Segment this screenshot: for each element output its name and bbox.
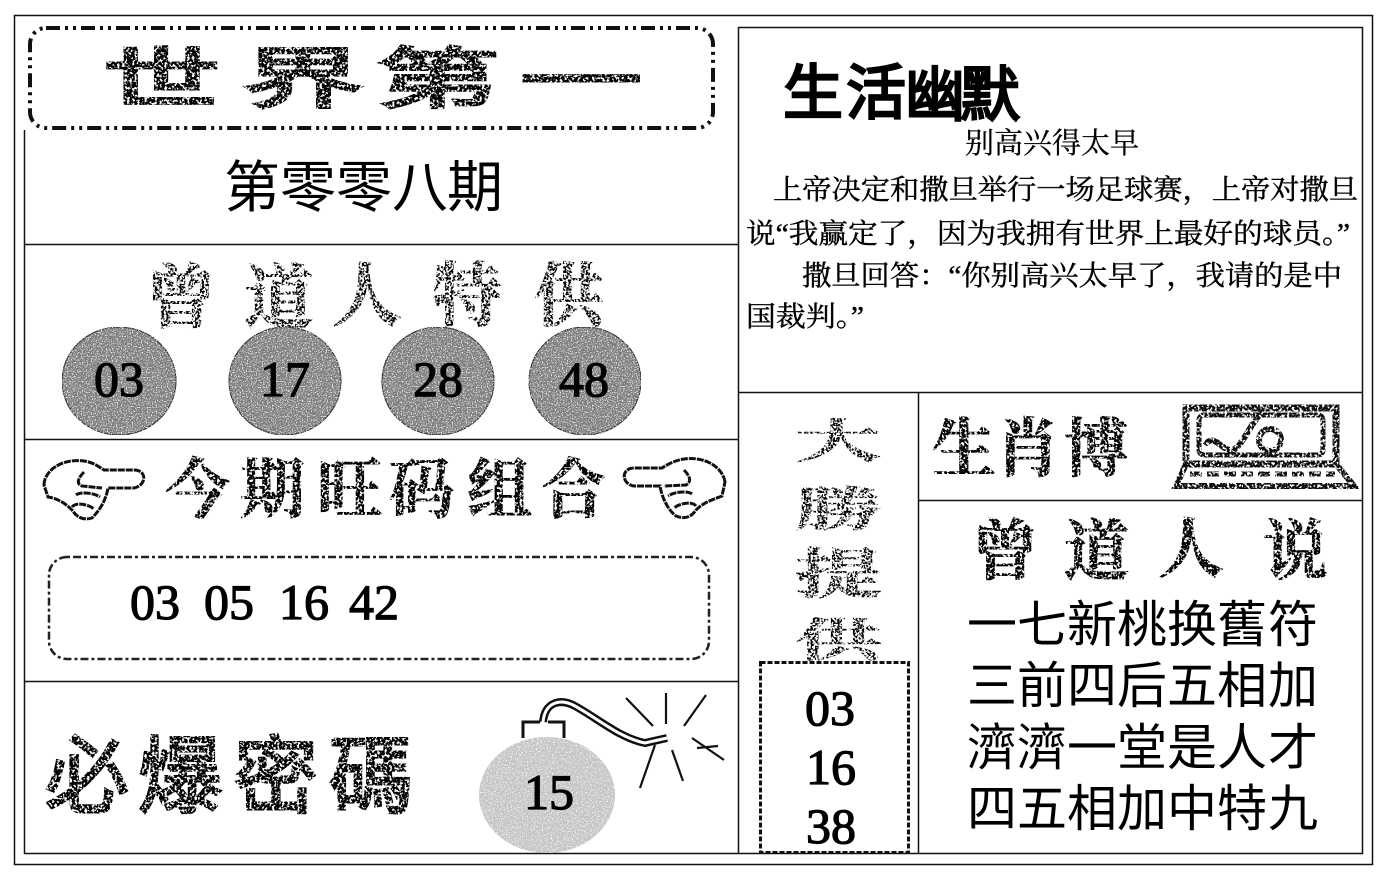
issue number: 第零零八期 bbox=[224, 156, 503, 219]
poem: 三前四后五相加 bbox=[967, 658, 1318, 714]
vertical heading: 供 bbox=[795, 615, 886, 666]
heading: 特 bbox=[432, 259, 502, 336]
heading: 码 bbox=[389, 455, 454, 527]
heading: 博 bbox=[1064, 414, 1128, 485]
icon: right pointing hand bbox=[624, 459, 725, 518]
icon: computer bbox=[1176, 408, 1354, 486]
panel: bomb code bbox=[45, 693, 724, 853]
icon: bomb bbox=[479, 693, 724, 853]
heading: 今 bbox=[165, 455, 230, 527]
box numbers: 16 bbox=[806, 739, 856, 795]
story title: 别高兴得太早 bbox=[965, 127, 1139, 160]
story text: 上帝决定和撒旦举行一场足球赛，上帝对撒旦 bbox=[773, 174, 1358, 206]
heading: 说 bbox=[1262, 516, 1328, 589]
vertical heading: 勝 bbox=[795, 485, 882, 537]
heading: 人 bbox=[332, 259, 402, 336]
heading: 人 bbox=[1158, 514, 1224, 587]
heading: 生 bbox=[783, 60, 843, 127]
title text bbox=[103, 42, 642, 118]
heading: 必 bbox=[45, 730, 129, 824]
panel: title bbox=[30, 28, 713, 128]
heading: 幽 bbox=[905, 62, 965, 129]
combination numbers bbox=[130, 574, 399, 630]
panel: sponsor column bbox=[760, 417, 908, 854]
poem: 四五相加中特九 bbox=[967, 781, 1318, 837]
icon: left pointing hand bbox=[44, 461, 144, 519]
heading: 爆 bbox=[138, 730, 222, 824]
vertical heading: 提 bbox=[795, 544, 882, 605]
dashed number box bbox=[49, 557, 709, 659]
panel: humour story bbox=[746, 60, 1358, 333]
heading bbox=[45, 730, 413, 824]
heading bbox=[146, 259, 608, 338]
panel: zodiac bbox=[932, 408, 1354, 486]
ball numbers: 17 bbox=[260, 351, 310, 407]
heading bbox=[783, 60, 1020, 129]
ball numbers bbox=[94, 351, 609, 407]
title text: 第 bbox=[376, 43, 500, 117]
heading: 生 bbox=[932, 414, 996, 485]
heading: 曾 bbox=[146, 261, 216, 338]
heading: 曾 bbox=[972, 516, 1038, 589]
heading: 组 bbox=[467, 455, 532, 527]
heading: 肖 bbox=[996, 414, 1060, 485]
ball numbers: 03 bbox=[94, 351, 144, 407]
title text: 界 bbox=[242, 42, 364, 116]
heading: 道 bbox=[1064, 516, 1130, 589]
poem: 濟濟一堂是人才 bbox=[967, 720, 1318, 776]
heading bbox=[972, 514, 1328, 589]
story text: 撒旦回答：“你别高兴太早了，我请的是中 bbox=[802, 260, 1342, 292]
ball numbers: 48 bbox=[559, 351, 609, 407]
heading: 默 bbox=[960, 62, 1020, 129]
heading bbox=[165, 455, 606, 527]
heading: 旺 bbox=[317, 455, 382, 527]
panel: special numbers bbox=[62, 259, 641, 435]
poem: 一七新桃换舊符 bbox=[967, 597, 1318, 653]
ball numbers: 28 bbox=[413, 351, 463, 407]
story text: 说“我赢定了，因为我拥有世界上最好的球员。” bbox=[746, 218, 1350, 250]
combination numbers: 42 bbox=[349, 574, 399, 630]
heading: 供 bbox=[534, 259, 608, 336]
heading: 合 bbox=[541, 455, 606, 527]
box numbers: 03 bbox=[805, 680, 855, 736]
dashed number box bbox=[760, 662, 908, 852]
heading: 期 bbox=[240, 455, 305, 527]
combination numbers: 16 bbox=[279, 574, 329, 630]
heading: 密 bbox=[234, 730, 318, 824]
combination numbers: 03 bbox=[130, 574, 180, 630]
heading bbox=[932, 414, 1128, 485]
heading: 道 bbox=[244, 261, 314, 338]
vertical heading: 大 bbox=[795, 417, 882, 469]
box numbers bbox=[805, 680, 856, 854]
vertical heading bbox=[795, 417, 886, 666]
title dashed frame bbox=[30, 28, 713, 128]
box numbers: 38 bbox=[806, 798, 856, 854]
story text bbox=[746, 174, 1358, 333]
bomb number: 15 bbox=[524, 764, 574, 820]
heading: 活 bbox=[846, 60, 906, 127]
number balls bbox=[62, 327, 641, 435]
heading: 碼 bbox=[329, 730, 413, 824]
poem bbox=[967, 597, 1318, 837]
title text: 一 bbox=[520, 44, 642, 118]
combination numbers: 05 bbox=[204, 574, 254, 630]
panel: number combination bbox=[44, 455, 725, 659]
title text: 世 bbox=[103, 43, 220, 117]
story text: 国裁判。” bbox=[746, 301, 864, 333]
panel: prophecy poem bbox=[967, 514, 1328, 837]
